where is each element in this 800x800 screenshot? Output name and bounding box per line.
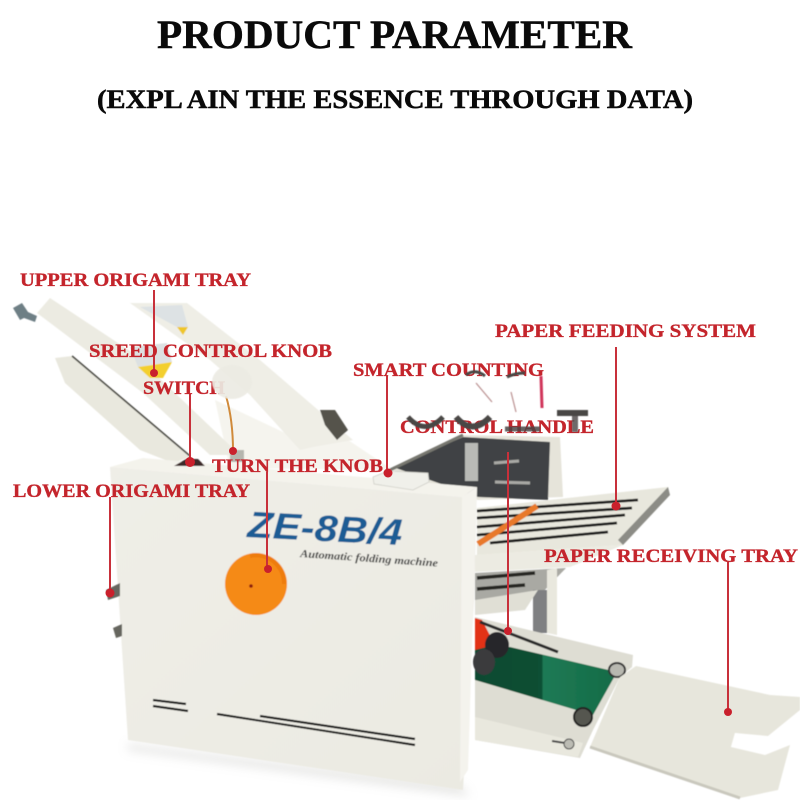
side levers xyxy=(106,583,120,600)
label: turn the knob: TURN THE KNOB xyxy=(212,456,383,477)
adjusting screw xyxy=(552,741,565,743)
green conveyor belt xyxy=(475,647,617,715)
switch xyxy=(174,459,205,466)
tray thumb screw xyxy=(13,303,37,322)
label: speed control knob: SREED CONTROL KNOB xyxy=(89,341,332,362)
paper feeding tray xyxy=(477,487,670,555)
label: paper feeding system: PAPER FEEDING SYSTEM xyxy=(495,321,756,342)
rear fold plate xyxy=(130,303,353,450)
dark interior xyxy=(393,437,550,500)
panel slots xyxy=(153,700,415,745)
image artifacts over labels xyxy=(408,372,588,432)
knob post xyxy=(230,450,244,462)
red roller and black rollers xyxy=(475,618,495,650)
label: control handle: CONTROL HANDLE xyxy=(400,417,594,438)
label: smart counting: SMART COUNTING xyxy=(353,360,544,381)
product caption: Automatic folding machine xyxy=(299,548,438,570)
smudge over switch label xyxy=(212,365,252,399)
orange dial xyxy=(225,553,287,615)
upper origami tray xyxy=(37,298,240,455)
rear wall xyxy=(215,400,393,470)
shadow under machine xyxy=(128,744,470,796)
middle tray xyxy=(475,545,623,572)
folding machine illustration xyxy=(13,298,800,798)
orange strap xyxy=(478,506,537,544)
smart counter box xyxy=(373,471,429,490)
label: upper origami tray: UPPER ORIGAMI TRAY xyxy=(20,270,251,291)
machine front panel xyxy=(110,467,477,790)
tray notch xyxy=(731,733,790,755)
model name: ZE-8B/4 xyxy=(245,504,404,553)
subtitle: (EXPL AIN THE ESSENCE THROUGH DATA) xyxy=(97,85,693,114)
label: paper receiving tray: PAPER RECEIVING TRAY xyxy=(544,546,798,567)
label lines and dots xyxy=(106,290,732,716)
rear cabinet xyxy=(393,435,563,500)
label: lower origami tray: LOWER ORIGAMI TRAY xyxy=(13,481,250,502)
lower origami tray xyxy=(55,356,190,463)
machine top face xyxy=(110,458,477,497)
base plate xyxy=(475,617,633,758)
label: switch: SWITCH xyxy=(143,378,225,399)
title: PRODUCT PARAMETER xyxy=(157,12,633,57)
paper receiving tray xyxy=(590,666,800,798)
